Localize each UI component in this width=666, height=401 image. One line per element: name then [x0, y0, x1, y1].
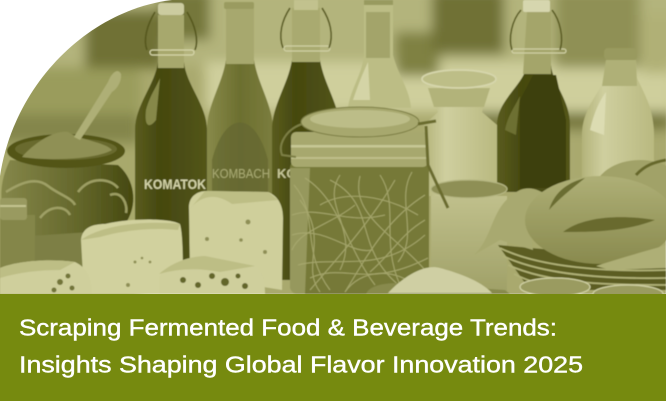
- bottle: Komatok: [135, 3, 207, 262]
- jar clasp: [418, 121, 448, 208]
- fermented paste: [22, 132, 112, 159]
- bread basket: [474, 160, 666, 290]
- cheese block: front with herbs: [159, 256, 265, 294]
- cheese block: center front: [81, 220, 183, 294]
- small lidded jars: [519, 276, 664, 294]
- bottle label text: KOMATOK: [144, 176, 206, 192]
- cheese block: front left: [0, 260, 92, 294]
- ceramic pot of paste: [1, 71, 133, 236]
- title line 1: Scraping Fermented Food & Beverage Trends:: [19, 314, 557, 340]
- bottle label text: KOMBACH: [212, 166, 270, 181]
- linen fold: [596, 245, 666, 270]
- title line 2: Insights Shaping Global Flavor Innovation 2025: [19, 352, 583, 378]
- bottle: third kombucha: [272, 0, 340, 280]
- cheese block: back right: [189, 191, 283, 290]
- dark base under pot: [34, 232, 84, 266]
- bottle label text: KO: [277, 166, 296, 181]
- bread loaf front: [525, 176, 666, 264]
- milk carafe: [422, 70, 497, 196]
- small jar on left: [0, 198, 35, 273]
- glass of milk: [431, 180, 507, 294]
- dark bottle with swing top: [497, 0, 570, 192]
- large glass jar with shredded cabbage: [281, 107, 448, 294]
- shredded slaw on plate: [366, 267, 510, 294]
- bottle: light liquid: [348, 0, 411, 108]
- title band: [0, 294, 666, 401]
- photo: fermented foods with olive duotone: [0, 0, 666, 304]
- wooden spoon: [74, 71, 121, 140]
- blurred kitchen background: [0, 0, 666, 304]
- milk bottle: [582, 48, 654, 180]
- bottle: Kombacha: [207, 2, 273, 200]
- bread loaf back: [600, 160, 666, 200]
- linen cloth: [482, 188, 542, 250]
